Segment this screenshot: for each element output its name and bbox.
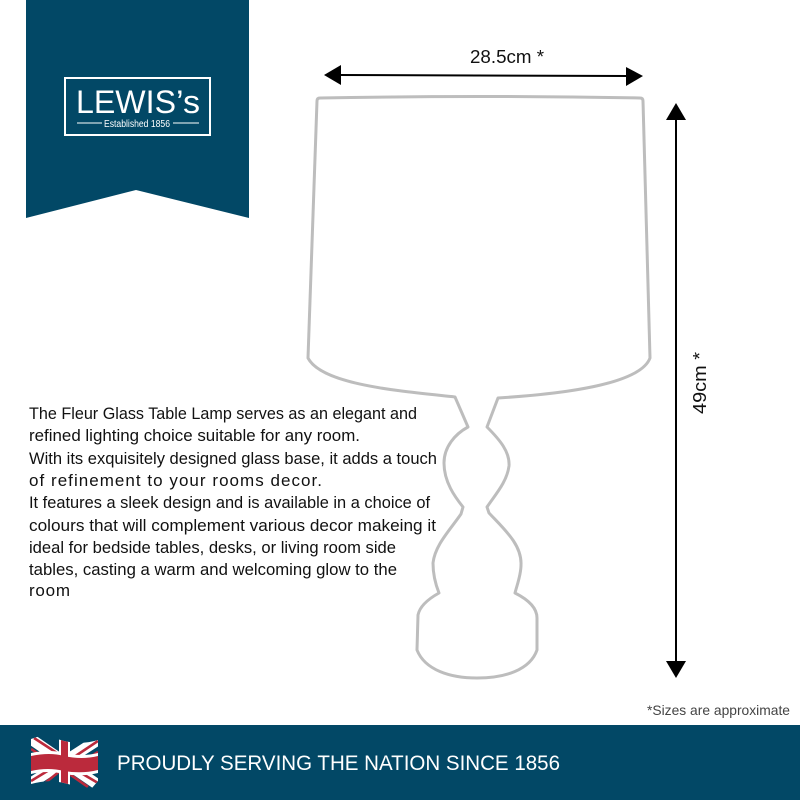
footer bar — [0, 725, 800, 800]
footer slogan: PROUDLY SERVING THE NATION SINCE 1856 — [117, 752, 560, 775]
description text: tables, casting a warm and welcoming glow to the — [29, 560, 397, 579]
description text: ideal for bedside tables, desks, or living room side — [29, 538, 396, 557]
description text: refined lighting choice suitable for any room. — [29, 426, 360, 445]
logo: Lewis's: ’s — [176, 84, 200, 120]
description text: The Fleur Glass Table Lamp serves as an elegant and — [29, 404, 417, 423]
description text: colours that will complement various decor makeing it — [29, 516, 436, 535]
description text — [29, 404, 437, 600]
width label: 28.5cm * — [470, 47, 544, 67]
icon: union flag — [28, 737, 101, 789]
lamp outline — [308, 96, 650, 678]
description text: With its exquisitely designed glass base, it adds a touch — [29, 449, 437, 468]
description text: room — [29, 581, 70, 600]
sizes note: *Sizes are approximate — [647, 702, 790, 718]
height arrow — [666, 103, 686, 678]
height label: 49cm * — [690, 352, 710, 414]
logo: Lewis's — [65, 78, 210, 135]
description text: of refinement to your rooms decor. — [29, 471, 322, 490]
banner with logo — [26, 0, 249, 218]
logo: Lewis's: LEWIS — [76, 84, 176, 120]
description text: It features a sleek design and is available in a choice of — [29, 493, 430, 512]
width arrow — [324, 65, 643, 86]
logo: Lewis's: Established 1856 — [104, 119, 170, 130]
